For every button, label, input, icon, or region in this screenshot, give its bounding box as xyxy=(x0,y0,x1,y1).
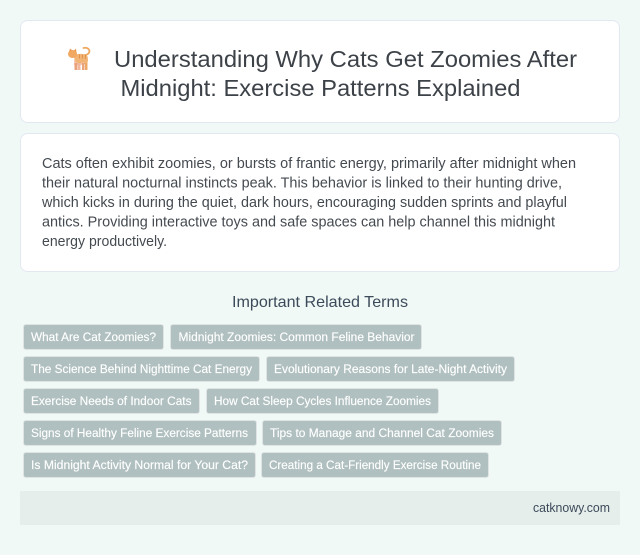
heading: related terms: Important Related Terms xyxy=(232,294,408,311)
tag: Midnight Zoomies: Common Feline Behavior xyxy=(178,330,414,344)
tag: Exercise Needs of Indoor Cats xyxy=(31,394,192,408)
tag xyxy=(262,420,502,446)
description text: which kicks in during the quiet, dark hours, encouraging sudden sprints and playful xyxy=(41,195,567,211)
description text: antics. Providing interactive toys and safe spaces can help channel this midnight xyxy=(42,214,555,230)
tag xyxy=(206,388,438,414)
footer: catknowy.com xyxy=(533,501,610,515)
description text: Cats often exhibit zoomies, or bursts of frantic energy, primarily after midnight when xyxy=(42,156,576,172)
tag: How Cat Sleep Cycles Influence Zoomies xyxy=(214,394,431,408)
tag xyxy=(24,324,164,350)
title xyxy=(114,46,577,101)
description text: energy productively. xyxy=(42,234,167,250)
tag xyxy=(24,388,200,414)
tag xyxy=(24,356,260,382)
tag: Tips to Manage and Channel Cat Zoomies xyxy=(270,426,494,440)
footer xyxy=(20,491,620,525)
tag: What Are Cat Zoomies? xyxy=(31,330,156,344)
tag: Signs of Healthy Feline Exercise Patterns xyxy=(31,426,248,440)
tag: The Science Behind Nighttime Cat Energy xyxy=(31,362,253,376)
panel: title card xyxy=(20,20,620,122)
tag: Evolutionary Reasons for Late-Night Activity xyxy=(274,362,508,376)
tag: Is Midnight Activity Normal for Your Cat? xyxy=(31,458,248,472)
tag list xyxy=(24,324,514,478)
tag xyxy=(170,324,422,350)
description text: their natural nocturnal instincts peak. This behavior is linked to their hunting drive, xyxy=(42,176,562,192)
tag: Creating a Cat-Friendly Exercise Routine xyxy=(269,458,481,472)
title: Midnight: Exercise Patterns Explained xyxy=(120,75,520,101)
tag xyxy=(24,420,256,446)
title: Understanding Why Cats Get Zoomies After xyxy=(114,46,577,72)
description text xyxy=(41,156,576,250)
panel: description xyxy=(20,134,620,272)
tag xyxy=(262,452,488,478)
icon: cat xyxy=(68,48,89,70)
tag xyxy=(266,356,514,382)
tag xyxy=(24,452,256,478)
